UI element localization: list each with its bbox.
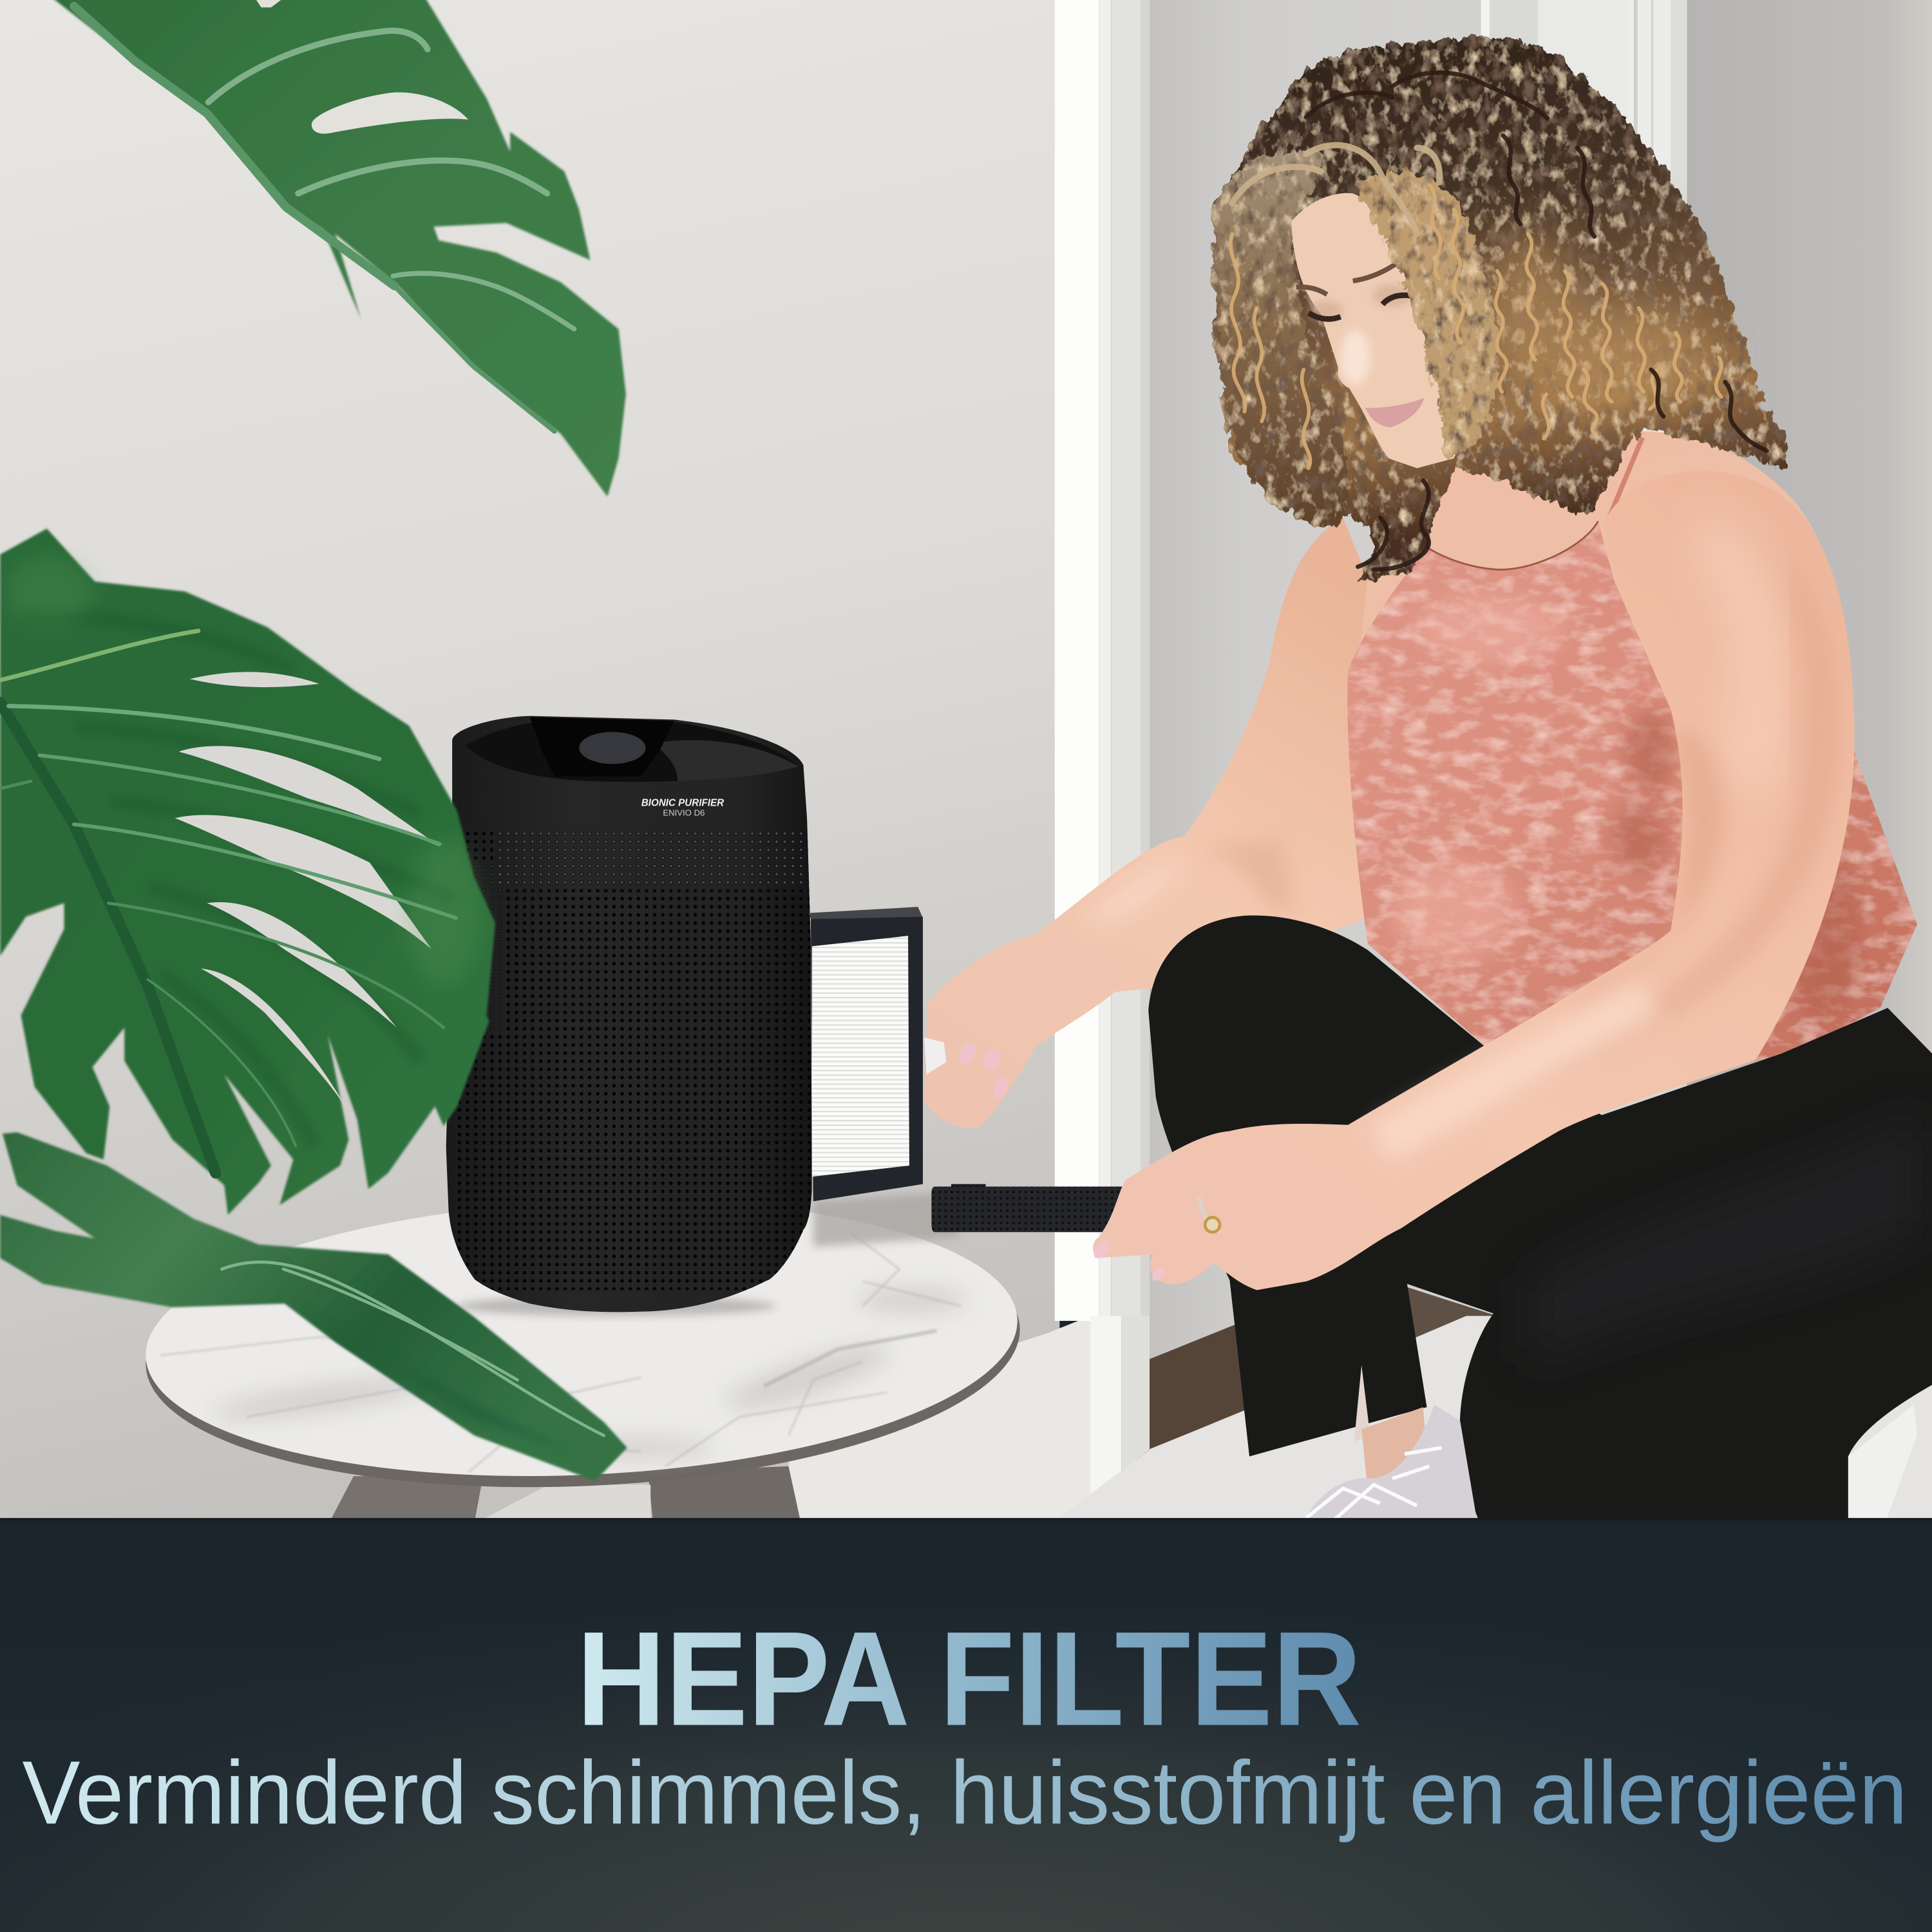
marble veins <box>160 1232 961 1472</box>
face <box>1291 193 1469 468</box>
purifier control cap <box>530 717 674 776</box>
lower leaf veins <box>222 1262 604 1435</box>
hair golden tips glow <box>1479 234 1712 413</box>
photo background: walls and door frames <box>0 0 1932 1528</box>
filter frame <box>811 916 923 1201</box>
leaf dark bands <box>24 616 456 1146</box>
brand text: BIONIC PURIFIER <box>641 797 724 808</box>
bottom banner <box>0 1518 1932 1932</box>
dark curls <box>1306 73 1767 569</box>
pink top <box>1347 437 1917 1072</box>
title: HEPA FILTER <box>576 1604 1361 1754</box>
charcoal filter strip <box>931 1184 1168 1232</box>
near arm and hand <box>1091 471 1854 1290</box>
far arm and hand <box>924 518 1368 1128</box>
top highlights <box>1392 594 1565 961</box>
top neckline <box>1427 521 1598 570</box>
purifier <box>437 708 819 1325</box>
hair left side lock <box>1212 149 1347 530</box>
golden curls <box>1231 185 1721 468</box>
eyes <box>1309 295 1411 319</box>
neck and chest <box>1356 431 1851 739</box>
front leaf: lower <box>0 1132 627 1481</box>
nails <box>1091 1238 1167 1283</box>
front leaf: top <box>52 0 626 497</box>
purifier body <box>437 708 819 1325</box>
top shadow folds <box>1612 710 1861 1023</box>
subtitle: Verminderd schimmels, huisstofmijt en allergieën <box>22 1743 1908 1843</box>
leaf midrib and veins <box>0 631 456 1173</box>
model text: ENIVIO D6 <box>663 809 705 818</box>
purifier button <box>579 732 646 764</box>
ring <box>1199 1197 1220 1232</box>
hair back layer <box>1214 37 1789 583</box>
halter strap <box>1609 437 1642 518</box>
marble table top <box>140 1182 1023 1494</box>
nose highlight <box>1341 330 1370 384</box>
leaf light patches <box>6 557 480 986</box>
front leaf: large monstera <box>0 529 495 1215</box>
lips <box>1365 398 1425 428</box>
leaf hole <box>312 92 468 134</box>
leaf slots <box>175 672 440 1115</box>
left sneaker <box>1302 1405 1477 1523</box>
table legs <box>329 1466 801 1523</box>
eyebrows <box>1296 261 1399 294</box>
light highlights on crown <box>1232 145 1439 234</box>
fingernails <box>956 1040 1010 1101</box>
filter sponge edge <box>808 907 923 924</box>
sneakers <box>1302 1405 1917 1523</box>
black trousers <box>1148 915 1932 1523</box>
leaf veins <box>74 6 574 431</box>
right sneaker <box>1848 1405 1917 1523</box>
hair front lock over the cheek <box>1353 171 1496 457</box>
HEPA filter cartridge <box>808 907 923 1201</box>
eye socket shading <box>1309 285 1412 320</box>
curly hair strands <box>1231 73 1767 569</box>
purifier and filter shadow on table <box>456 1296 776 1316</box>
filter pull tab <box>924 1037 946 1074</box>
table rim <box>140 1189 1026 1505</box>
marble clouding <box>209 1287 967 1457</box>
purifier top bowl <box>466 718 799 782</box>
table <box>140 1182 1026 1523</box>
pleated filter <box>812 936 909 1177</box>
